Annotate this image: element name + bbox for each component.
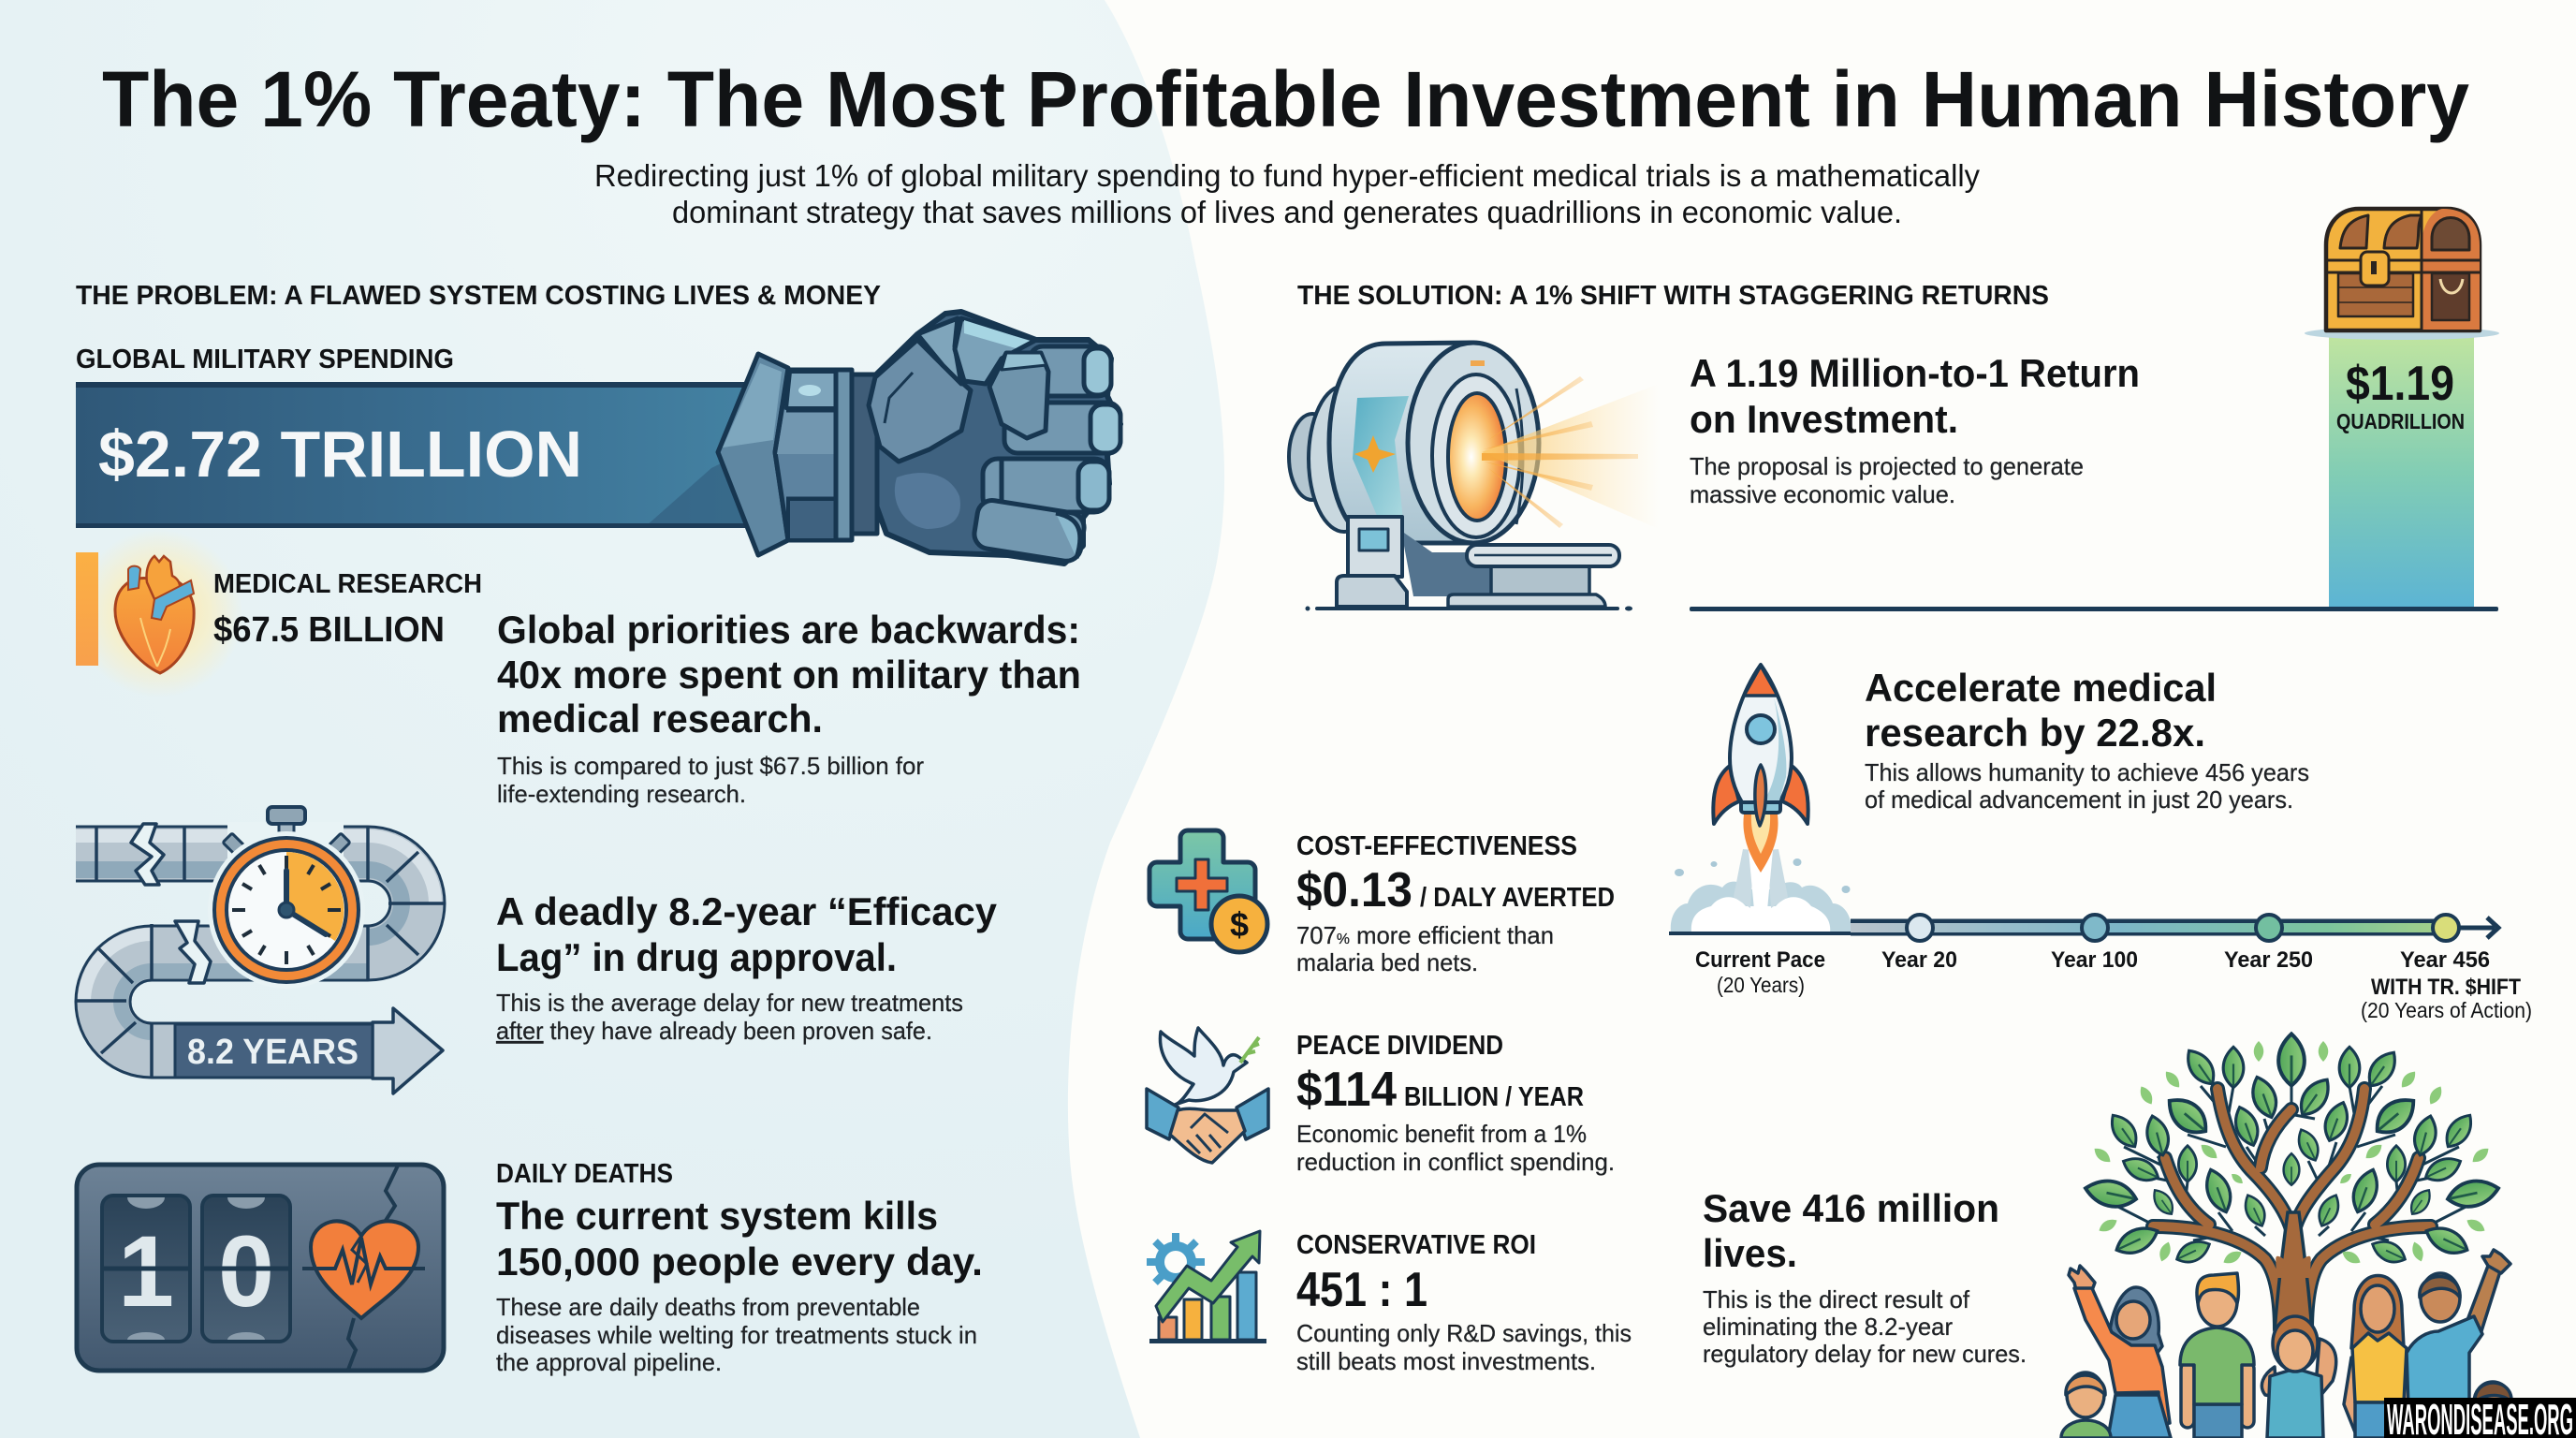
text block: daily deaths: 150,000 people every day. <box>496 1240 983 1284</box>
text block: daily deaths: DAILY DEATHS <box>496 1159 673 1189</box>
subtitle <box>594 158 1980 229</box>
text block: daily deaths: diseases while welting for treatments stuck in <box>496 1321 977 1349</box>
label: year 100: Year 100 <box>2051 947 2138 973</box>
icon: armored fist <box>718 312 1120 564</box>
text block: accelerate medical research: This allows humanity to achieve 456 years <box>1865 758 2309 786</box>
stat: conservative roi: Counting only R&D savings, this <box>1296 1319 1632 1347</box>
heading: the solution: THE SOLUTION: A 1% SHIFT WITH STAGGERING RETURNS <box>1297 281 2049 311</box>
background: light blue problem side <box>0 0 1224 1438</box>
icon: stopwatch <box>208 807 365 989</box>
text block: global priorities: life-extending research. <box>497 780 746 808</box>
label: quadrillion: QUADRILLION <box>2336 409 2465 433</box>
panel: the solution <box>1147 209 2532 1438</box>
person: woman with raised arm <box>2069 1266 2171 1438</box>
text block: daily deaths: The current system kills <box>496 1194 938 1238</box>
label: 20 years of action: (20 Years of Action) <box>2361 998 2532 1022</box>
icon: anatomical heart <box>115 556 194 673</box>
person: woman in yellow <box>2344 1275 2410 1438</box>
text block: global priorities <box>497 608 1081 808</box>
chart: research timeline <box>1669 915 2532 1022</box>
heading: the problem: THE PROBLEM: A FLAWED SYSTEM COSTING LIVES & MONEY <box>76 281 881 311</box>
icon: treasure chest <box>2326 209 2480 330</box>
text block: efficacy lag: Lag” in drug approval. <box>496 935 897 979</box>
stat: cost effectiveness: COST-EFFECTIVENESS <box>1296 831 1577 861</box>
text block: return on investment: A 1.19 Million-to-1 Return <box>1690 351 2140 395</box>
text block: accelerate medical research: of medical advancement in just 20 years. <box>1865 785 2293 814</box>
icon: winding pipeline with stopwatch <box>76 807 444 1093</box>
person: child in blue <box>2261 1316 2336 1438</box>
icon: medical scanner with light burst <box>1289 343 1659 610</box>
text block: accelerate medical research: research by 22.8x. <box>1865 711 2205 755</box>
text block: save 416 million lives: eliminating the 8.2-year <box>1703 1313 1953 1341</box>
title: The 1% Treaty: The Most Profitable Investment in Human History <box>102 55 2469 143</box>
flip digit 1: 1 <box>118 1214 174 1328</box>
flip digit 0: 0 <box>218 1214 274 1328</box>
person: small head behind label <box>2474 1382 2511 1423</box>
stat: cost effectiveness <box>1296 831 1615 976</box>
icon: rocket launch <box>1671 665 1852 932</box>
stat: peace dividend: reduction in conflict spending. <box>1296 1148 1615 1176</box>
flip digit 1 <box>102 1196 190 1342</box>
label: current pace: Current Pace <box>1695 947 1825 973</box>
stat: cost effectiveness: malaria bed nets. <box>1296 948 1478 976</box>
icon: tree of life <box>2083 1034 2501 1334</box>
label: year 250: Year 250 <box>2224 947 2313 973</box>
text block: accelerate medical research <box>1865 666 2309 814</box>
stat: peace dividend: Economic benefit from a 1% <box>1296 1120 1587 1148</box>
stat: cost effectiveness: 707% more efficient than <box>1296 921 1554 949</box>
text block: save 416 million lives <box>1703 1186 2027 1368</box>
value: 67.5 billion: $67.5 BILLION <box>213 610 445 650</box>
label: 20 years: (20 Years) <box>1717 973 1805 997</box>
text block: global priorities: 40x more spent on military than <box>497 653 1081 697</box>
flip digit 0 <box>202 1196 290 1342</box>
illustration: family under the tree <box>2061 1250 2511 1438</box>
icon: dove and handshake <box>1147 1028 1268 1163</box>
stat: peace dividend: BILLION / YEAR <box>1404 1082 1584 1112</box>
label: 8.2 years: 8.2 YEARS <box>187 1033 359 1072</box>
text block: efficacy lag: A deadly 8.2-year “Efficacy <box>496 889 998 933</box>
label: with treaty shift: WITH TR. $HIFT <box>2371 975 2521 1000</box>
text block: global priorities: This is compared to just $67.5 billion for <box>497 752 924 780</box>
stat: cost effectiveness: / DALY AVERTED <box>1420 883 1615 913</box>
callout: medical research <box>75 529 482 697</box>
icon: broken heart with pulse <box>302 1221 425 1318</box>
panel: the problem <box>75 281 1120 1376</box>
stat: conservative roi: still beats most investments. <box>1296 1347 1596 1375</box>
text block: efficacy lag: This is the average delay for new treatments <box>496 989 963 1017</box>
text block: daily deaths: the approval pipeline. <box>496 1348 722 1376</box>
bar: military spending <box>76 382 768 528</box>
bar: military spending: $2.72 TRILLION <box>98 418 582 491</box>
text block: accelerate medical research: Accelerate medical <box>1865 666 2217 710</box>
text block: return on investment: massive economic value. <box>1690 480 1955 508</box>
person: boy at left <box>2061 1372 2111 1438</box>
stat: peace dividend: PEACE DIVIDEND <box>1296 1031 1503 1061</box>
person: man in green shirt <box>2180 1273 2254 1438</box>
text block: daily deaths <box>496 1159 983 1376</box>
text block: save 416 million lives: regulatory delay for new cures. <box>1703 1340 2027 1368</box>
icon: medical cross with coin: $ <box>1230 905 1249 944</box>
text block: save 416 million lives: This is the direct result of <box>1703 1285 1970 1313</box>
label: medical research: MEDICAL RESEARCH <box>213 569 482 599</box>
text block: save 416 million lives: lives. <box>1703 1231 1797 1275</box>
value: 1.19: $1.19 <box>2346 357 2454 411</box>
stat: conservative roi: CONSERVATIVE ROI <box>1296 1230 1536 1260</box>
text block: save 416 million lives: Save 416 million <box>1703 1186 1999 1230</box>
text block: return on investment: The proposal is projected to generate <box>1690 452 2084 480</box>
stat: peace dividend: $114 <box>1296 1063 1397 1117</box>
stat: conservative roi: 451 : 1 <box>1296 1263 1427 1317</box>
icon: gear and growth chart <box>1147 1231 1266 1343</box>
text block: global priorities: medical research. <box>497 697 823 741</box>
subtitle: Redirecting just 1% of global military spending to fund hyper-efficient medical trials is a mathematically <box>594 158 1980 193</box>
icon: flip counter with broken heart <box>77 1165 444 1371</box>
text block: return on investment: on Investment. <box>1690 397 1958 441</box>
text block: global priorities: Global priorities are backwards: <box>497 608 1080 652</box>
person: man waving at right <box>2407 1250 2510 1438</box>
text block: efficacy lag: after they have already been proven safe. <box>496 1017 932 1045</box>
text block: return on investment <box>1690 351 2140 508</box>
stat: cost effectiveness: $0.13 <box>1296 863 1412 917</box>
label: global military spending: GLOBAL MILITARY SPENDING <box>76 345 454 374</box>
label: year 456: Year 456 <box>2400 947 2490 973</box>
label: year 20: Year 20 <box>1881 947 1957 973</box>
stat: conservative roi <box>1296 1230 1632 1375</box>
text block: daily deaths: These are daily deaths from preventable <box>496 1293 920 1321</box>
icon: medical cross with coin <box>1149 830 1267 952</box>
subtitle: dominant strategy that saves millions of lives and generates quadrillions in economic value. <box>672 195 1902 229</box>
stat: peace dividend <box>1296 1031 1615 1176</box>
bar chart: 1.19 quadrillion <box>1690 209 2499 611</box>
text block: efficacy lag <box>496 889 998 1045</box>
